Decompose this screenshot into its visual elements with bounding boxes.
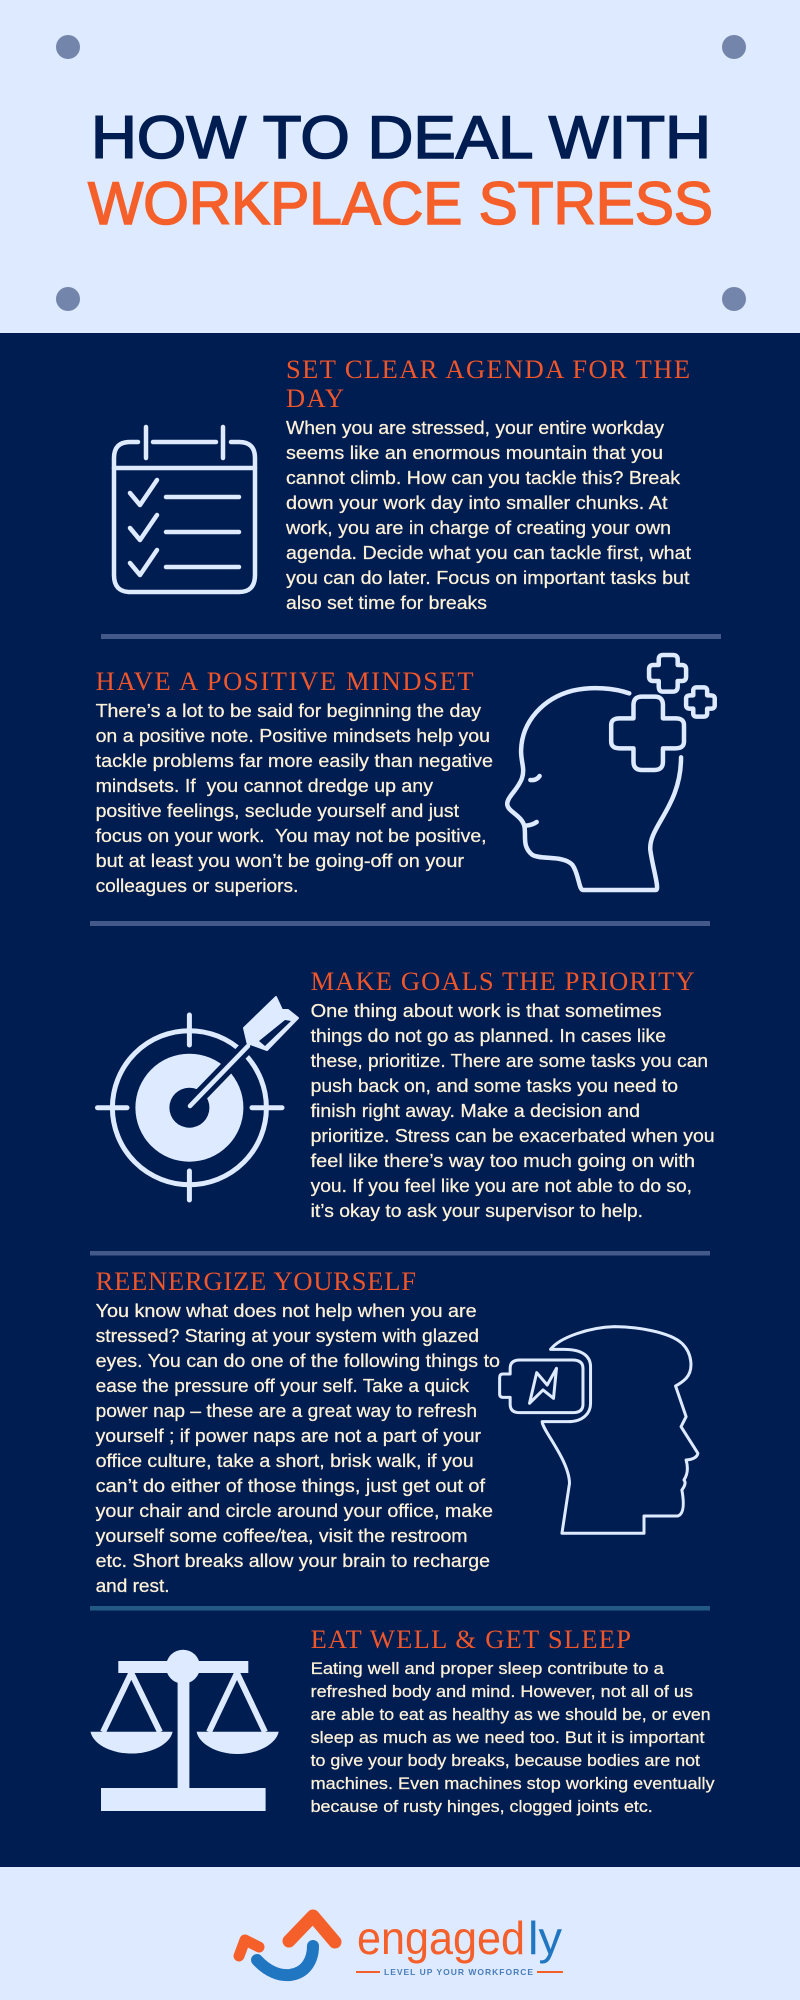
body text: your chair and circle around your office, make [96,1501,493,1521]
body text: yourself some coffee/tea, visit the restroom [96,1526,468,1546]
body text: and rest. [96,1576,170,1596]
body text: machines. Even machines stop working eventually [311,1775,715,1793]
body text: but at least you won’t be going-off on your [96,851,464,871]
body text: positive feelings, seclude yourself and just [96,801,459,821]
header panel [0,0,800,333]
body text: refreshed body and mind. However, not all of us [311,1683,693,1701]
body text [311,1660,715,1816]
body text [285,418,691,613]
body text: Eating well and proper sleep contribute to a [311,1660,665,1678]
icon: balance scale [90,1650,279,1811]
icon: head with battery [500,1327,698,1533]
body text: things do not go as planned. In cases like [311,1026,666,1046]
section: positive mindset [96,655,715,896]
body text [311,1001,715,1221]
body text: you can do later. Focus on important tasks but [286,568,690,588]
section: eat well and get sleep [90,1624,715,1816]
heading: REENERGIZE YOURSELF [96,1266,416,1296]
body text: sleep as much as we need too. But it is important [311,1729,705,1747]
wordmark: engaged [357,1912,525,1964]
heading: SET CLEAR AGENDA FOR THE [286,354,690,384]
body text: mindsets. If you cannot dredge up any [96,776,433,796]
body text: ease the pressure off your self. Take a quick [96,1376,470,1396]
heading: HAVE A POSITIVE MINDSET [96,666,474,696]
body text: seems like an enormous mountain that you [286,443,663,463]
body text: eyes. You can do one of the following things to [96,1351,500,1371]
body text: When you are stressed, your entire workday [286,418,664,438]
heading: MAKE GOALS THE PRIORITY [311,966,695,996]
body text: etc. Short breaks allow your brain to recharge [96,1551,490,1571]
body text: office culture, take a short, brisk walk, if you [96,1451,474,1471]
title: WORKPLACE STRESS [88,170,713,237]
section: make goals the priority [98,966,715,1221]
body text: because of rusty hinges, clogged joints etc. [311,1798,653,1816]
body text: stressed? Staring at your system with glazed [96,1326,479,1346]
icon: target with arrow [98,997,298,1200]
body text [96,1301,500,1596]
body text: feel like there’s way too much going on with [311,1151,695,1171]
body text: you. If you feel like you are not able to do so, [311,1176,692,1196]
body text: to give your body breaks, because bodies are not [311,1752,700,1770]
body text: prioritize. Stress can be exacerbated when you [311,1126,715,1146]
body text: these, prioritize. There are some tasks you can [311,1051,708,1071]
icon: engagedly arrows [239,1916,335,1975]
heading: DAY [286,383,344,413]
heading [286,354,690,413]
body text: work, you are in charge of creating your own [285,518,671,538]
body text: finish right away. Make a decision and [311,1101,640,1121]
body text: down your work day into smaller chunks. At [286,493,668,513]
body text: colleagues or superiors. [96,876,298,896]
body text: tackle problems far more easily than negative [96,751,493,771]
corner dots [56,35,746,311]
body text: agenda. Decide what you can tackle first, what [286,543,691,563]
body text: can’t do either of those things, just get out of [96,1476,486,1496]
tagline: LEVEL UP YOUR WORKFORCE [384,1967,533,1977]
body text: There’s a lot to be said for beginning the day [96,701,481,721]
body text: on a positive note. Positive mindsets help you [96,726,490,746]
body text: You know what does not help when you are [96,1301,477,1321]
heading: EAT WELL & GET SLEEP [311,1624,631,1654]
body text: also set time for breaks [286,593,487,613]
body text: it’s okay to ask your supervisor to help. [311,1201,643,1221]
body text: are able to eat as healthy as we should be, or even [311,1706,711,1724]
body text: yourself ; if power naps are not a part of your [96,1426,481,1446]
body text [96,701,493,896]
body text: cannot climb. How can you tackle this? Break [286,468,681,488]
icon: calendar checklist [114,427,255,592]
body text: One thing about work is that sometimes [311,1001,662,1021]
section: set clear agenda [114,354,691,613]
footer logo: ly [528,1912,562,1964]
body text: push back on, and some tasks you need to [311,1076,678,1096]
body text: focus on your work. You may not be positive, [96,826,487,846]
icon: head with plus signs [507,655,715,890]
footer logo [239,1912,563,1977]
main navy panel [0,333,800,1867]
title: HOW TO DEAL WITH [91,104,711,171]
body text: power nap – these are a great way to refresh [96,1401,477,1421]
title [88,104,713,237]
section: reenergize yourself [96,1266,698,1596]
